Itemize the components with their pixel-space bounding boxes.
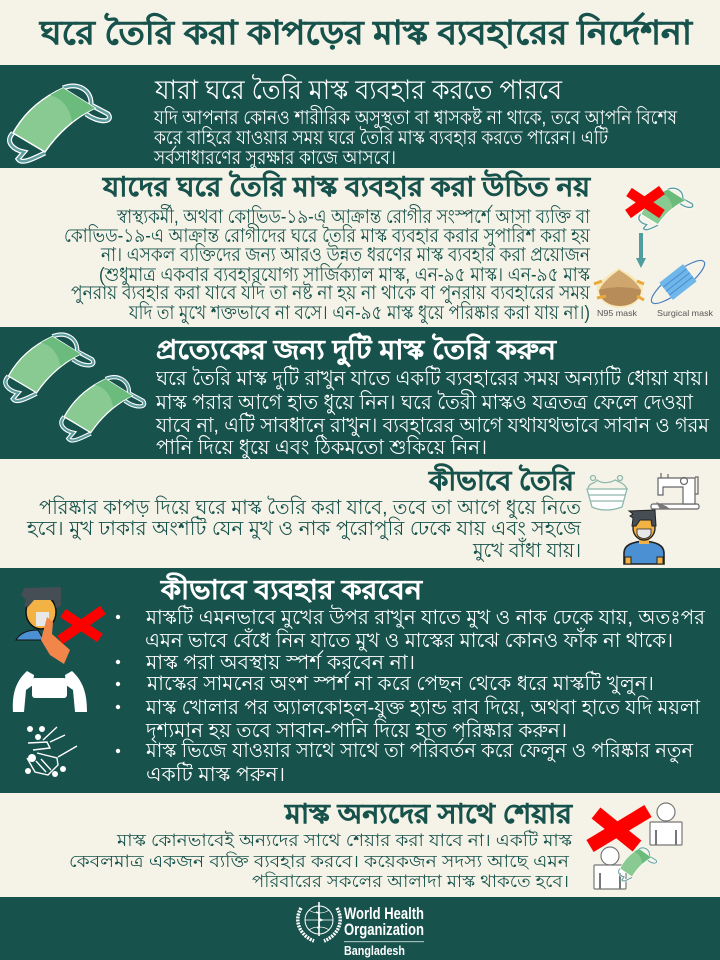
heading: who should not use: যাদের ঘরে তৈরি মাস্ক ব্যবহার করা উচিত নয় [102, 169, 591, 202]
icon: hand washing [25, 726, 77, 777]
heading: make two masks: প্রত্যেকের জন্য দুটি মাস্ক তৈরি করুন [156, 332, 557, 367]
panel: make two masks each [0, 327, 720, 459]
icon: sewing machine [651, 473, 699, 509]
text block: who should not use: কোভিড-১৯-এ আক্রান্ত রোগীদের ঘরে তৈরি মাস্ক ব্যবহার করার সুপারিশ করা হয় [64, 223, 591, 247]
icon: person wearing mask [624, 510, 664, 564]
bullet list: মাস্ক খোলার পর অ্যালকোহল-যুক্ত হ্যান্ড রাব দিয়ে, অথবা হাতে যদি ময়লা [145, 696, 701, 719]
bullet list [116, 605, 706, 786]
panel: how to make [26, 463, 699, 564]
icon: two cloth masks [5, 335, 144, 441]
heading: how to use: কীভাবে ব্যবহার করবেন [160, 572, 423, 605]
text block: sharing masks [69, 830, 573, 891]
text block: sharing masks: পরিবারের সকলের আলাদা মাস্ক থাকতে হবে। [252, 871, 569, 891]
bullet list: মাস্ক ভিজে যাওয়ার সাথে সাথে তা পরিবর্তন করে ফেলুন ও পরিষ্কার নতুন [145, 738, 694, 763]
text block: sharing masks: মাস্ক কোনভাবেই অন্যদের সাথে শেয়ার করা যাবে না। একটি মাস্ক [116, 830, 573, 850]
icon: hands removing mask [13, 671, 87, 712]
text block: make two masks: মাস্ক পরার আগে হাত ধুয়ে নিন। ঘরে তৈরী মাস্কও যত্রতত্র ফেলে দেওয়া [155, 389, 694, 414]
text block: how to make: হবে। মুখ ঢাকার অংশটি যেন মুখ ও নাক পুরোপুরি ঢেকে যায় এবং সহজে [26, 516, 582, 540]
arrow: cloth to medical masks [636, 233, 646, 268]
text block: how to make: মুখে বাঁধা যায়। [472, 538, 581, 562]
logo: World Health Organization wordmark [344, 904, 424, 958]
footer band [0, 897, 720, 960]
icon: washing bowl [587, 476, 627, 510]
bullet list: মাস্কটি এমনভাবে মুখের উপর রাখুন যাতে মুখ ও নাক ঢেকে যায়, অতঃপর [145, 605, 706, 629]
text block: who should not use: না। এসকল ব্যক্তিদের জন্য আরও উন্নত ধরণের মাস্ক ব্যবহার করা প্রয়োজন [100, 242, 591, 266]
text block: who can use [153, 105, 678, 169]
bullet list: মাস্ক পরা অবস্থায় স্পর্শ করবেন না। [145, 650, 415, 674]
label: Surgical mask: Surgical mask [657, 308, 714, 318]
heading: sharing masks: মাস্ক অন্যদের সাথে শেয়ার [284, 799, 573, 829]
icon: cloth mask [9, 86, 109, 161]
heading: how to make: কীভাবে তৈরি [428, 463, 575, 496]
text block: who should not use [64, 204, 591, 324]
text block: who should not use: (শুধুমাত্র একবার ব্যবহারযোগ্য সার্জিক্যাল মাস্ক, এন-৯৫ মাস্ক। এন-৯৫ মাস্ক [99, 262, 591, 286]
panel: who should not use homemade masks [64, 169, 714, 324]
text block: how to make [26, 496, 582, 562]
logo: World Health Organization wordmark: Organization [344, 920, 424, 939]
text block: who can use: সর্বসাধারণের সুরক্ষার কাজে আসবে। [153, 145, 396, 169]
panel: how to use [0, 568, 720, 793]
icon: crossed-out cloth mask [628, 188, 693, 230]
title: ঘরে তৈরি করা কাপড়ের মাস্ক ব্যবহারের নির্দেশনা [39, 12, 694, 51]
heading: who can use: যারা ঘরে তৈরি মাস্ক ব্যবহার করতে পারবে [154, 74, 563, 105]
bullet list: একটি মাস্ক পরুন। [146, 762, 285, 786]
text block: sharing masks: কেবলমাত্র একজন ব্যক্তি ব্যবহার করবে। কয়েকজন সদস্য আছে এমন [69, 851, 570, 871]
text block: who should not use: স্বাস্থ্যকর্মী, অথবা কোভিড-১৯-এ আক্রান্ত রোগীর সংস্পর্শে আসা ব্যক্তি বা [116, 204, 591, 228]
text block: make two masks: পানি দিয়ে ধুয়ে এবং ঠিকমতো শুকিয়ে নিন। [156, 434, 487, 459]
bullet list: মাস্কের সামনের অংশ স্পর্শ না করে পেছন থেকে ধরে মাস্কটি খুলুন। [146, 671, 654, 695]
text block: how to make: পরিষ্কার কাপড় দিয়ে ঘরে মাস্ক তৈরি করা যাবে, তবে তা আগে ধুয়ে নিতে [39, 496, 582, 519]
icon: surgical mask [645, 253, 711, 311]
text block: who can use: করে বাহিরে যাওয়ার সময় ঘরে তৈরি মাস্ক ব্যবহার করতে পারেন। এটি [153, 125, 609, 149]
bullet list: এমন ভাবে বেঁধে নিন যাতে মুখ ও মাস্কের মাঝে কোনও ফাঁক না থাকে। [145, 628, 673, 652]
logo: World Health Organization wordmark: World Health [344, 904, 424, 923]
text block: make two masks: ঘরে তৈরি মাস্ক দুটি রাখুন যাতে একটি ব্যবহারের সময় অন্যাটি ধোয়া যায়। [155, 365, 709, 390]
text block: who should not use: যদি তা মুখে শক্তভাবে না বসে। এন-৯৫ মাস্ক ধুয়ে পরিষ্কার করা যায় না।) [128, 301, 590, 324]
icon: N95 mask [594, 268, 644, 308]
icon: do not touch mask [16, 587, 103, 664]
text block: who should not use: পুনরায় ব্যবহার করা যাবে যদি তা নষ্ট না হয় না থাকে বা পুনরায় ব্যবহারের সময় [71, 281, 591, 304]
icon: two people sharing a mask crossed out [590, 803, 682, 889]
logo: WHO emblem [298, 902, 340, 941]
logo: World Health Organization wordmark: Bangladesh [344, 944, 405, 958]
text block: make two masks [155, 365, 710, 459]
label: N95 mask: N95 mask [597, 308, 638, 318]
bullet list: দৃশ্যমান হয় তবে সাবান-পানি দিয়ে হাত পরিষ্কার করুন। [145, 719, 567, 742]
panel: who can use homemade masks [0, 65, 720, 169]
panel: sharing masks [69, 799, 682, 891]
